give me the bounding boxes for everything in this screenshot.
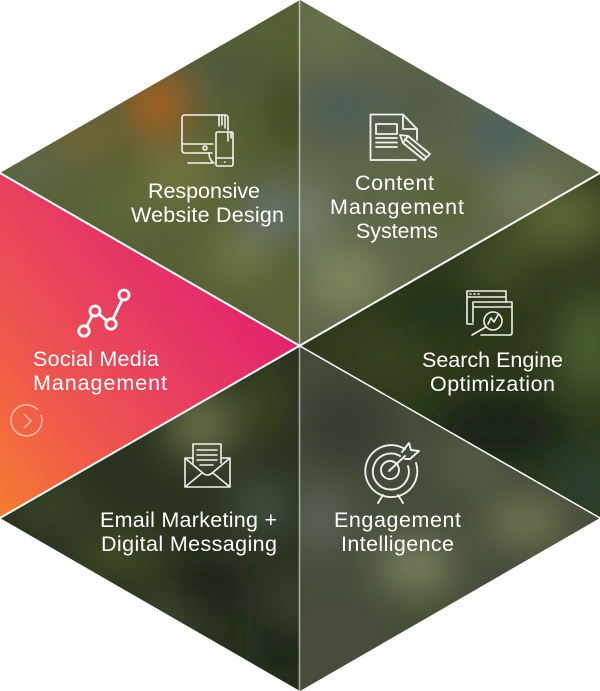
panel: search engine optimization sector background bbox=[301, 174, 600, 518]
icon: responsive devices bbox=[182, 115, 233, 166]
heading: social media management bbox=[33, 347, 167, 395]
panel: email marketing sector background bbox=[0, 346, 300, 691]
panel: content management systems sector background bbox=[300, 0, 600, 344]
icon: open envelope bbox=[185, 444, 230, 487]
heading: search engine optimization bbox=[422, 348, 563, 396]
heading: email marketing + digital messaging: Digital Messaging bbox=[101, 532, 277, 556]
heading: search engine optimization: Search Engine bbox=[422, 348, 563, 372]
heading: search engine optimization: Optimization bbox=[430, 372, 555, 396]
icon: content document and pencil bbox=[370, 114, 430, 160]
heading: content management systems bbox=[330, 171, 464, 243]
heading: email marketing + digital messaging: Email Marketing + bbox=[100, 508, 277, 532]
heading: engagement intelligence bbox=[334, 508, 461, 556]
icon: search engine windows bbox=[467, 291, 512, 335]
heading: email marketing + digital messaging bbox=[100, 508, 277, 556]
panel: social media management highlighted sector bbox=[0, 173, 300, 518]
heading: social media management: Management bbox=[33, 371, 167, 395]
icon: circled arrow bbox=[11, 405, 42, 436]
heading: content management systems: Content bbox=[355, 171, 434, 195]
icon: line chart nodes bbox=[79, 290, 129, 336]
heading: responsive website design: Responsive bbox=[148, 179, 260, 203]
panel: engagement intelligence sector background bbox=[300, 346, 600, 691]
heading: responsive website design bbox=[131, 179, 284, 227]
panel: responsive website design sector background bbox=[0, 0, 300, 344]
heading: content management systems: Systems bbox=[356, 219, 438, 243]
icon: target with arrow bbox=[365, 443, 419, 503]
heading: engagement intelligence: Intelligence bbox=[341, 532, 454, 556]
heading: content management systems: Management bbox=[330, 195, 464, 219]
heading: engagement intelligence: Engagement bbox=[334, 508, 461, 532]
heading: social media management: Social Media bbox=[33, 347, 159, 371]
heading: responsive website design: Website Design bbox=[131, 203, 284, 227]
